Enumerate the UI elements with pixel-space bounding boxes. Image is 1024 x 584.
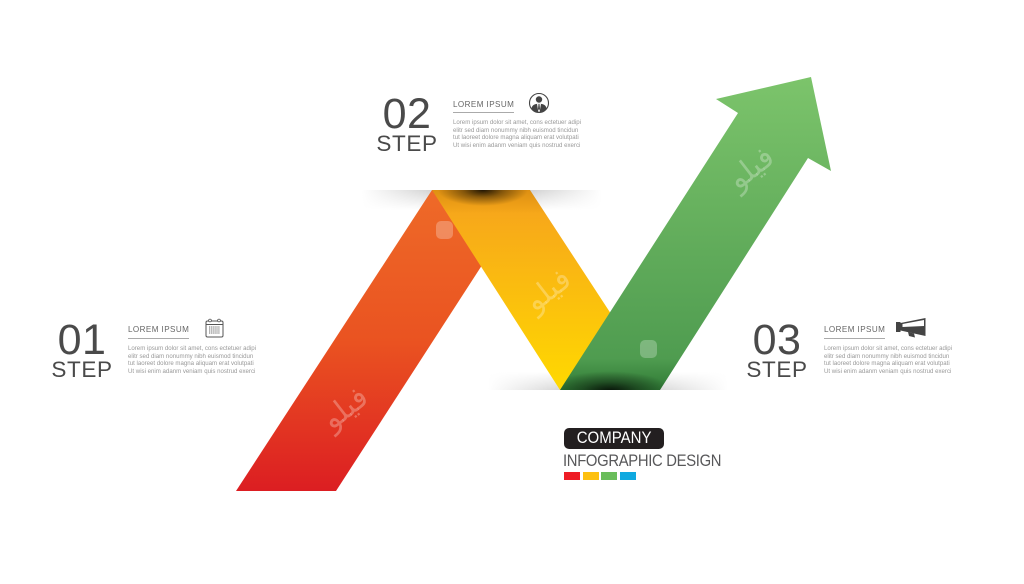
step 02 text: Ut wisi enim adanm veniam quis nostrud exerci bbox=[453, 142, 580, 149]
watermark marks: فيلو bbox=[720, 140, 781, 199]
ribbon: green arrow bbox=[560, 77, 831, 390]
step 02 text: Lorem ipsum dolor sit amet, cons ectetuer adipi bbox=[453, 119, 581, 126]
paper shadow: bottom fold bbox=[488, 372, 728, 390]
watermark marks: فيلو bbox=[314, 380, 375, 439]
step 01 rule bbox=[128, 338, 189, 339]
ribbon arrow chart bbox=[236, 77, 831, 491]
ribbon: orange bbox=[236, 190, 486, 491]
infographic design label: INFOGRAPHIC DESIGN bbox=[563, 452, 721, 470]
step 01 label: STEP bbox=[51, 357, 113, 382]
step 03 text bbox=[824, 345, 952, 375]
step 01 text bbox=[128, 345, 256, 375]
step 03 text: Ut wisi enim adanm veniam quis nostrud exerci bbox=[824, 368, 951, 375]
step 02 number: 02 bbox=[383, 90, 431, 138]
step 02 rule bbox=[453, 112, 514, 113]
step 02 text: elitr sed diam nonummy nibh euismod tincidun bbox=[453, 127, 578, 134]
step 01 text: elitr sed diam nonummy nibh euismod tincidun bbox=[128, 353, 253, 360]
step 03 text: elitr sed diam nonummy nibh euismod tincidun bbox=[824, 353, 949, 360]
step 03 text: Lorem ipsum dolor sit amet, cons ectetuer adipi bbox=[824, 345, 952, 352]
step 03 label: STEP bbox=[746, 357, 808, 382]
paper shadow: top fold bbox=[362, 190, 602, 210]
step 01 text: tut laoreet dolore magna aliquam erat volutpati bbox=[128, 360, 254, 367]
icon: calendar bbox=[206, 318, 224, 338]
step 01 heading: LOREM IPSUM bbox=[128, 325, 189, 334]
step 01 text: Ut wisi enim adanm veniam quis nostrud exerci bbox=[128, 368, 255, 375]
step 03 rule bbox=[824, 338, 885, 339]
step 03 heading: LOREM IPSUM bbox=[824, 325, 885, 334]
company badge: COMPANY bbox=[577, 429, 651, 447]
icon: businessman bbox=[528, 93, 550, 113]
step 02 text bbox=[453, 119, 581, 149]
step 02 block bbox=[376, 90, 581, 156]
watermark marks bbox=[314, 140, 781, 439]
step 03 number: 03 bbox=[753, 316, 801, 364]
company logo bbox=[563, 428, 721, 480]
company badge bbox=[564, 428, 664, 449]
step 01 text: Lorem ipsum dolor sit amet, cons ectetuer adipi bbox=[128, 345, 256, 352]
step 01 block bbox=[51, 316, 256, 382]
icon: megaphone bbox=[896, 318, 926, 338]
step 02 heading: LOREM IPSUM bbox=[453, 100, 514, 109]
step 01 number: 01 bbox=[58, 316, 106, 364]
step 02 text: tut laoreet dolore magna aliquam erat volutpati bbox=[453, 134, 579, 141]
ribbon: yellow bbox=[432, 174, 615, 390]
step 03 block bbox=[746, 316, 952, 382]
step 03 text: tut laoreet dolore magna aliquam erat volutpati bbox=[824, 360, 950, 367]
colour swatches bbox=[564, 472, 636, 480]
step 02 label: STEP bbox=[376, 131, 438, 156]
watermark marks: فيلو bbox=[517, 262, 578, 321]
